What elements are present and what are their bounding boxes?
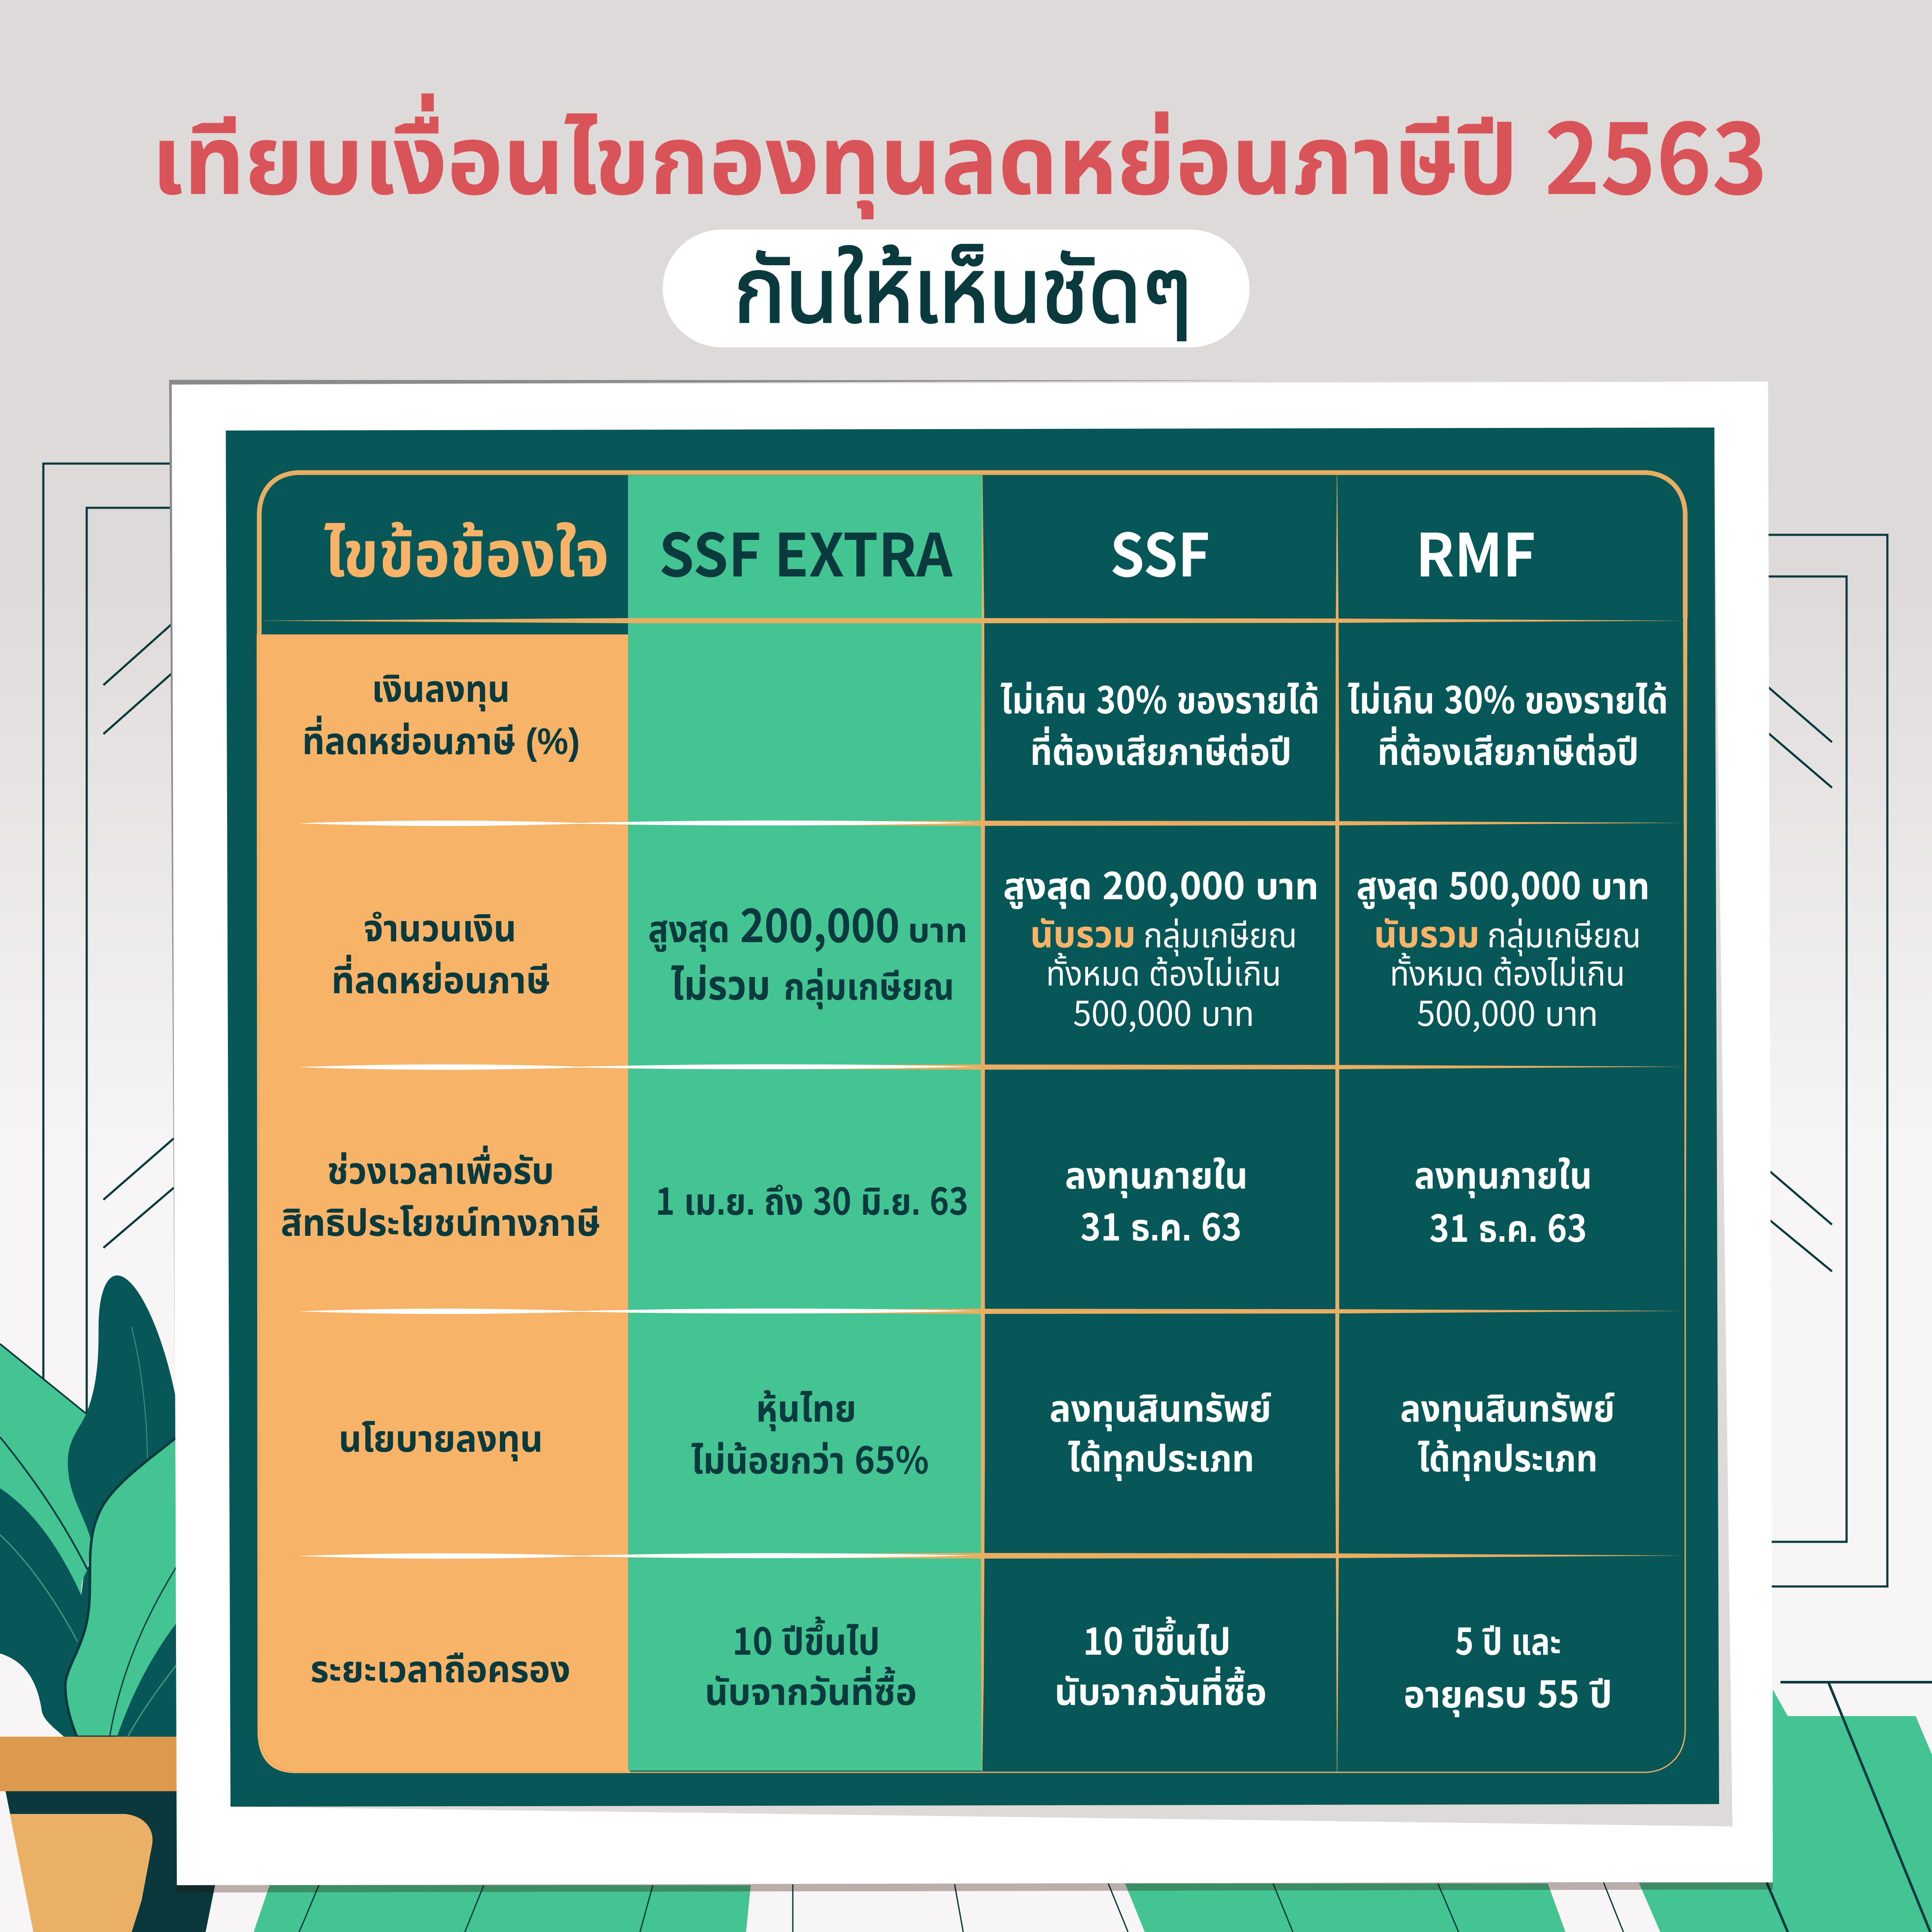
row: deductible percent [302, 669, 1668, 773]
left green leaf [0, 1344, 91, 1595]
SSF EXTRA value: นับจากวันที่ซื้อ [705, 1666, 917, 1713]
label: เงินลงทุน [372, 669, 510, 711]
SSF value: 10 ปีขึ้นไป [1083, 1612, 1231, 1665]
SSF value [1065, 1156, 1248, 1251]
header: key points: ไขข้อข้องใจ [324, 518, 609, 590]
top border [259, 473, 1685, 635]
label [281, 1145, 601, 1244]
RMF value: ลงทุนภายใน [1414, 1156, 1592, 1198]
pill background [663, 230, 1250, 347]
label [331, 908, 550, 1001]
SSF EXTRA value: สูงสุด [648, 909, 730, 952]
RMF value [1400, 1389, 1615, 1481]
title: เทียบเงื่อนไขกองทุนลดหย่อนภาษีปี 2563 [152, 82, 1768, 222]
SSF EXTRA value: ไม่รวม [671, 963, 770, 1009]
lower dark leaf vein [0, 1535, 78, 1642]
green SSF EXTRA column [628, 475, 982, 1771]
RMF value: สูงสุด 500,000 บาท [1356, 856, 1650, 910]
RMF value [1356, 856, 1650, 1036]
left leaf lines [0, 1344, 88, 1570]
RMF value: กลุ่มเกษียณ [1487, 916, 1641, 956]
white highlights [298, 821, 974, 1559]
SSF value: 31 ธ.ค. 63 [1080, 1198, 1242, 1251]
lower dark leaf [0, 1488, 103, 1737]
orange label column [257, 634, 630, 1773]
header: SSF EXTRA: SSF EXTRA [659, 508, 953, 594]
label: ที่ลดหย่อนภาษี (%) [302, 716, 580, 762]
SSF EXTRA value: กลุ่มเกษียณ [784, 967, 954, 1009]
RMF value: ไม่เกิน 30% ของรายได้ [1348, 670, 1668, 724]
RMF value: ได้ทุกประเภท [1418, 1438, 1598, 1481]
row: investment policy [339, 1389, 1615, 1484]
window frames left [43, 464, 174, 1413]
subtitle text: กันให้เห็นชัดๆ [734, 240, 1192, 341]
subtitle pill [663, 230, 1250, 347]
RMF value: 31 ธ.ค. 63 [1429, 1199, 1587, 1253]
label: นโยบายลงทุน [339, 1419, 543, 1461]
header: SSF: SSF [1110, 508, 1210, 594]
SSF EXTRA value: 10 ปีขึ้นไป [732, 1612, 880, 1665]
label: จำนวนเงิน [364, 908, 516, 949]
pot label [10, 1814, 152, 1932]
front leaf veins [109, 1561, 180, 1737]
SSF value: นับจากวันที่ซื้อ [1055, 1666, 1267, 1713]
SSF value [1055, 1612, 1267, 1713]
RMF value: 5 ปี และ [1455, 1612, 1561, 1665]
SSF value: นับรวม [1030, 914, 1136, 955]
RMF value: ที่ต้องเสียภาษีต่อปี [1377, 726, 1639, 773]
SSF EXTRA value: 200,000 [740, 889, 900, 956]
back leaf vein [131, 1327, 147, 1459]
RMF value: นับรวม [1374, 914, 1480, 955]
RMF value: ทั้งหมด ต้องไม่เกิน [1390, 953, 1625, 993]
front leaf light vein [127, 1660, 180, 1737]
RMF value [1414, 1156, 1592, 1253]
card drop shadow [177, 1882, 1773, 1893]
comparison table [253, 473, 1687, 1773]
SSF value [1049, 1389, 1271, 1481]
white card [172, 382, 1773, 1885]
SSF value: สูงสุด 200,000 บาท [1003, 856, 1319, 910]
RMF value [1348, 670, 1668, 773]
header row [324, 508, 1536, 594]
SSF EXTRA value [648, 889, 968, 1009]
table outline [259, 473, 1685, 1772]
SSF value: ไม่เกิน 30% ของรายได้ [1001, 670, 1319, 724]
SSF EXTRA value: 1 เม.ย. ถึง 30 มิ.ย. 63 [655, 1172, 968, 1225]
label [302, 669, 580, 762]
RMF value: อายุครบ 55 ปี [1404, 1665, 1612, 1718]
front leaf dark wedge [117, 1619, 180, 1737]
window frames right [1766, 535, 1887, 1586]
RMF value: ลงทุนสินทรัพย์ [1400, 1389, 1615, 1431]
front green leaf [65, 1435, 180, 1737]
row: time period [281, 1145, 1592, 1253]
SSF EXTRA value [691, 1389, 929, 1484]
label: สิทธิประโยชน์ทางภาษี [281, 1203, 601, 1244]
back leaf [68, 1275, 177, 1574]
SSF value: ที่ต้องเสียภาษีต่อปี [1030, 726, 1292, 773]
RMF value: 500,000 บาท [1417, 986, 1598, 1036]
SSF value: ทั้งหมด ต้องไม่เกิน [1046, 953, 1281, 993]
floor [254, 1682, 1932, 1932]
label: ระยะเวลาถือครอง [310, 1649, 570, 1690]
label: ช่วงเวลาเพื่อรับ [327, 1145, 554, 1192]
SSF value [1001, 670, 1319, 773]
RMF value [1404, 1612, 1612, 1718]
row: deductible amount [331, 856, 1650, 1036]
SSF EXTRA value [705, 1612, 917, 1713]
SSF value: ลงทุนภายใน [1065, 1156, 1248, 1198]
card top edge shadow [169, 380, 1288, 1374]
panel grey shadow [231, 472, 1732, 1826]
SSF value [1003, 856, 1319, 1036]
floor green planks bottom [254, 1689, 1932, 1932]
SSF EXTRA value: หุ้นไทย [756, 1389, 856, 1431]
right border emphasis [1683, 618, 1687, 1674]
SSF value: 500,000 บาท [1073, 986, 1254, 1036]
header: RMF: RMF [1416, 508, 1536, 594]
SSF EXTRA value: ไม่น้อยกว่า 65% [691, 1431, 929, 1484]
row: holding period [310, 1612, 1612, 1718]
SSF value: ลงทุนสินทรัพย์ [1049, 1389, 1271, 1431]
label: ที่ลดหย่อนภาษี [331, 955, 550, 1001]
SSF EXTRA value: บาท [908, 912, 968, 949]
column dividers [981, 475, 1339, 1771]
pot body [6, 1791, 215, 1932]
plant [0, 1275, 180, 1737]
floor lines [299, 1682, 1932, 1932]
plant pot [0, 1737, 215, 1932]
SSF value: ได้ทุกประเภท [1068, 1438, 1254, 1481]
teal panel [226, 428, 1719, 1807]
row dividers [253, 618, 1685, 1559]
SSF value: กลุ่มเกษียณ [1143, 916, 1297, 956]
pot rim [0, 1737, 180, 1791]
